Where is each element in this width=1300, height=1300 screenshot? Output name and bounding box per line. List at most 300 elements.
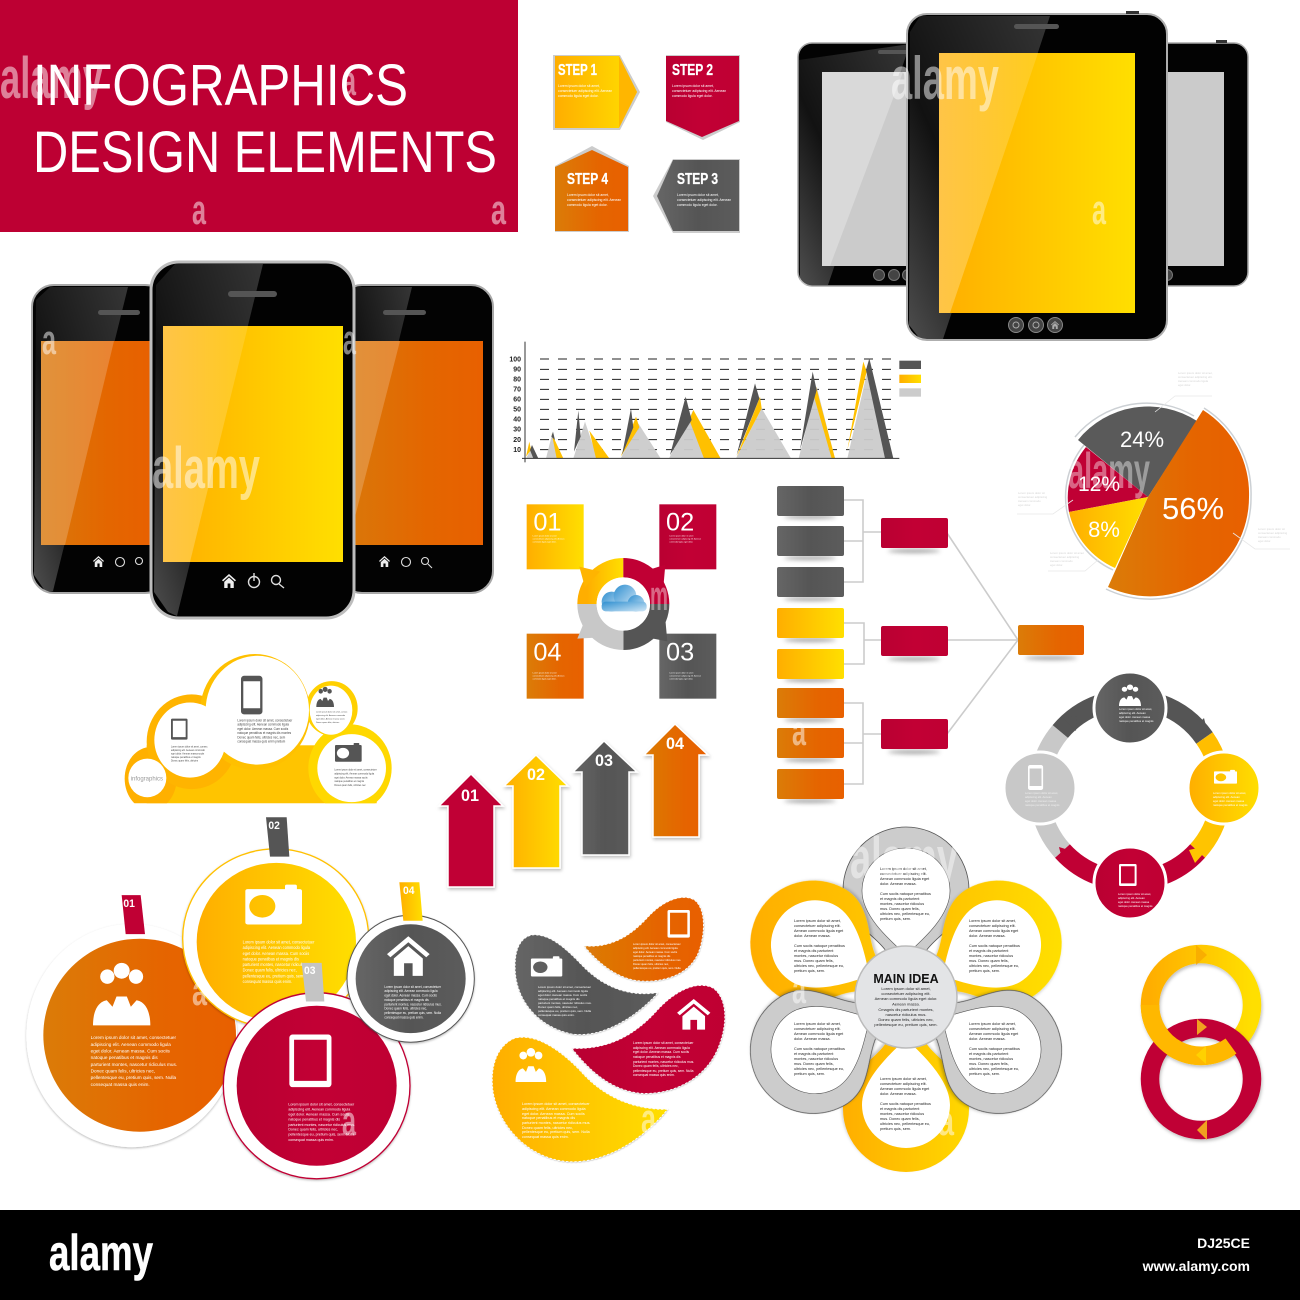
teardrop text: pellentesque eu, pretium quis, sem. Nulla	[522, 1130, 591, 1134]
petal texts: dolor. Aenean massa.	[880, 1092, 917, 1096]
circle text: adipiscing elit. Aenean commodo ligula	[243, 945, 311, 950]
circle text: eget dolor. Aenean massa. Cum sociis	[91, 1048, 170, 1054]
teardrop text: Lorem ipsum dolor sit amet, consectetuer	[522, 1102, 590, 1106]
node: yellow: Lorem ipsum dolor sit amet,	[1213, 791, 1246, 795]
petal texts: Aenean commodo ligula eget	[794, 929, 844, 933]
circle text: pellentesque eu, pretium quis, sem. Nulla	[91, 1075, 176, 1081]
watermarks: a	[192, 186, 206, 233]
cloud captions: adipiscing elit. Aenean commodo ligula	[334, 772, 375, 775]
circle 04: dark grey	[347, 882, 474, 1042]
percentage labels: 24%	[1120, 427, 1164, 452]
petal texts: et magnis dis parturient	[880, 1107, 920, 1111]
step 2: Lorem ipsum dolor sit amet,	[672, 84, 714, 88]
teardrop text: eget dolor. Aenean massa. Cum sociis	[633, 950, 678, 954]
header banner	[0, 0, 518, 232]
chart legend	[899, 361, 921, 397]
cloud captions: adipiscing elit. Aenean commodo ligula	[237, 723, 289, 727]
percentage labels: 56%	[1162, 491, 1224, 526]
back right tablet	[1150, 40, 1248, 286]
cloud captions: Donec quam felis, ultricies nec, sem	[237, 735, 286, 739]
circle text: adipiscing elit. Aenean commodo ligula	[288, 1107, 351, 1111]
box 04: Lorem ipsum dolor sit amet	[533, 671, 557, 674]
circle text: eget dolor. Aenean massa. Cum sociis	[243, 951, 309, 956]
petal texts: et magnis dis parturient	[969, 949, 1009, 953]
pie captions and leaders: Lorem ipsum dolor sit	[1018, 491, 1045, 495]
teardrop: red	[572, 985, 725, 1093]
box 01: Lorem ipsum dolor sit amet	[533, 535, 557, 538]
pie captions and leaders: Lorem ipsum dolor sit amet,	[1178, 371, 1213, 375]
icon: people	[516, 1048, 546, 1082]
chart axis labels: 40	[513, 417, 521, 424]
petal texts: montes, nascetur ridiculus	[880, 902, 924, 906]
tag 01: 01	[123, 898, 135, 910]
teardrop: orange	[584, 897, 703, 981]
tag 02	[266, 817, 289, 857]
step 3	[653, 159, 740, 233]
petal texts: et magnis dis parturient	[794, 1052, 834, 1056]
mountain chart	[509, 342, 921, 462]
main idea heading: MAIN IDEA	[873, 972, 939, 986]
organization tree	[777, 486, 1084, 803]
teardrop text	[522, 942, 694, 1139]
node: red	[1094, 847, 1166, 919]
teardrop text: parturient montes, nascetur ridiculus mus.	[633, 1060, 694, 1064]
pie captions and leaders: eget dolor.	[1050, 563, 1063, 567]
pie rim	[1066, 403, 1251, 599]
circle text: Donec quam felis, ultricies nec,	[384, 1007, 427, 1011]
petal texts: ultricies nec, pellentesque eu,	[969, 1067, 1019, 1071]
middle boxes	[881, 518, 948, 749]
teardrop text: adipiscing elit. Aenean commodo ligula	[633, 1046, 690, 1050]
petal texts: consectetuer adipiscing elit.	[794, 1027, 841, 1031]
petal texts: Cum sociis natoque penatibus	[969, 944, 1020, 948]
circle text: Donec quam felis, ultricies nec,	[288, 1128, 338, 1132]
petal texts: Lorem ipsum dolor sit amet,	[880, 1077, 927, 1081]
petal: lower right grey	[892, 952, 1085, 1137]
cloud panel	[125, 654, 392, 812]
footer logo: alamy	[49, 1225, 153, 1281]
ring arrow markers	[1196, 945, 1207, 1140]
box 02: 02	[666, 509, 694, 537]
circle text: parturient montes, nascetur ridiculus mus.	[91, 1062, 177, 1068]
icon: camera	[531, 956, 562, 976]
back left tablet	[798, 43, 923, 286]
tag 03	[302, 963, 324, 1002]
circle text: eget dolor. Aenean massa. Cum sociis	[288, 1113, 350, 1117]
pie captions and leaders: Aenean commodo ligula	[1178, 379, 1208, 383]
petal texts: dolor. Aenean massa.	[969, 934, 1006, 938]
node: light grey: eget dolor. Aenean massa	[1025, 799, 1057, 803]
node: red: Lorem ipsum dolor sit amet,	[1118, 892, 1151, 896]
back right phone	[340, 285, 493, 593]
cloud captions: Lorem ipsum dolor sit amet, consectetuer	[334, 769, 377, 772]
orange slice	[1108, 410, 1249, 596]
petal texts: pretium quis, sem.	[880, 917, 911, 921]
pie captions and leaders: consectetuer adipiscing	[1050, 555, 1080, 559]
teardrop text: natoque penatibus et magnis dis	[633, 1055, 681, 1059]
watermarks: m	[650, 572, 668, 619]
teardrop text: consequat massa quis enim.	[538, 1013, 575, 1017]
main idea text: Aenean commodo ligula eget dolor.	[875, 996, 937, 1001]
circle 01: orange	[26, 895, 237, 1147]
teardrop text: consequat massa quis enim.	[633, 1073, 675, 1077]
teardrop shapes	[492, 897, 725, 1162]
circle text: eget dolor. Aenean massa. Cum sociis	[384, 994, 437, 998]
node: dark: adipiscing elit. Aenean	[1119, 711, 1146, 715]
petal texts: Lorem ipsum dolor sit amet,	[969, 1022, 1016, 1026]
circle text: Lorem ipsum dolor sit amet, consectetuer	[91, 1035, 176, 1041]
node: dark: Lorem ipsum dolor sit amet,	[1119, 707, 1152, 711]
petal texts: mus. Donec quam felis,	[794, 959, 834, 963]
watermarks: a	[792, 965, 806, 1012]
petal: lower left grey	[727, 952, 920, 1137]
petal texts: montes, nascetur ridiculus	[880, 1112, 924, 1116]
cloud captions: Donec quam felis, ultricies	[316, 721, 339, 724]
image id: DJ25CE	[1197, 1235, 1250, 1251]
teardrop text: Donec quam felis, ultricies nec,	[633, 962, 669, 966]
petal texts: mus. Donec quam felis,	[880, 907, 920, 911]
petal texts: Aenean commodo ligula eget	[794, 1032, 844, 1036]
watermarks: a	[42, 316, 56, 363]
box 01: consectetuer adipiscing elit. Aenean	[533, 538, 564, 541]
watermarks: a	[192, 967, 207, 1014]
circle text: natoque penatibus et magnis dis	[91, 1055, 158, 1061]
petal texts: mus. Donec quam felis,	[880, 1117, 920, 1121]
petal texts: Cum sociis natoque penatibus	[880, 1102, 931, 1106]
petal texts: mus. Donec quam felis,	[794, 1062, 834, 1066]
petal texts: Cum sociis natoque penatibus	[794, 1047, 845, 1051]
chart axis labels	[509, 356, 521, 454]
icon: tablet	[289, 1035, 331, 1087]
tag 03: 03	[304, 965, 316, 977]
arrow 02: 02	[527, 765, 545, 784]
step 1: consectetuer adipiscing elit. Aenean	[558, 89, 612, 93]
petal texts: ultricies nec, pellentesque eu,	[880, 912, 930, 916]
petal texts: montes, nascetur ridiculus	[794, 1057, 838, 1061]
node: yellow: adipiscing elit. Aenean	[1213, 795, 1240, 799]
cloud captions	[171, 710, 377, 787]
cloud captions: natoque penatibus et magnis	[334, 780, 365, 783]
step 2: consectetuer adipiscing elit. Aenean	[672, 89, 726, 93]
cycle ring segments	[1040, 704, 1220, 876]
main idea text: nascetur ridiculus mus.	[886, 1012, 926, 1017]
teardrop text: eget dolor. Aenean massa. Cum sociis	[633, 1050, 689, 1054]
petal texts: Lorem ipsum dolor sit amet,	[880, 867, 927, 871]
petal texts: pretium quis, sem.	[969, 1072, 1000, 1076]
node: light grey: Lorem ipsum dolor sit amet,	[1025, 791, 1058, 795]
cloud captions: eget dolor. Aenean massa. Cum sociis	[237, 727, 289, 731]
teardrop text: natoque penatibus et magnis dis	[633, 954, 671, 958]
cloud captions: natoque penatibus et magnis dis montes	[237, 731, 292, 735]
step 2	[666, 55, 740, 140]
step 3: consectetuer adipiscing elit. Aenean	[677, 198, 731, 202]
circle text: parturient montes, nascetur ridiculus mus.	[243, 962, 315, 967]
cloud captions: Donec quam felis, ultricies	[171, 759, 199, 762]
red slice	[1068, 447, 1148, 512]
circle text: parturient montes, nascetur ridiculus mus.	[288, 1123, 355, 1127]
arrow 02	[504, 755, 568, 868]
node: light grey	[1004, 752, 1076, 824]
box 04: consectetuer adipiscing elit. Aenean	[533, 674, 564, 677]
teardrop text: Donec quam felis, ultricies nec,	[633, 1064, 679, 1068]
teardrop text: natoque penatibus et magnis dis	[522, 1116, 575, 1120]
teardrop text: Lorem ipsum dolor sit amet, consectetuer	[538, 985, 591, 989]
circle text: adipiscing elit. Aenean commodo ligula	[91, 1042, 171, 1048]
box 02: Lorem ipsum dolor sit amet	[669, 535, 694, 538]
box 03: 03	[666, 639, 694, 667]
four-part cloud diagram	[527, 504, 716, 699]
petal texts: ultricies nec, pellentesque eu,	[794, 964, 844, 968]
circle text: adipiscing elit. Aenean commodo ligula	[384, 989, 438, 993]
arrow 01: 01	[461, 786, 479, 805]
petal texts: montes, nascetur ridiculus	[794, 954, 838, 958]
pie captions and leaders: Aenean commodo	[1258, 535, 1281, 539]
watermarks: alamy	[0, 46, 103, 111]
node: dark: natoque penatibus et magnis	[1119, 719, 1154, 723]
phones	[32, 262, 493, 618]
tag 01	[122, 895, 145, 934]
chart axis labels: 100	[509, 356, 521, 363]
teardrop text: adipiscing elit. Aenean commodo ligula	[522, 1107, 586, 1111]
step 1: commodo ligula eget dolor.	[558, 94, 599, 98]
circle 02: yellow	[183, 817, 369, 1028]
tag 04	[399, 882, 423, 921]
node: light grey: natoque penatibus et magnis	[1025, 803, 1060, 807]
petal texts: consectetuer adipiscing elit.	[880, 1082, 927, 1086]
circle text: consequat massa quis enim.	[384, 1015, 424, 1019]
chart axis labels: 90	[513, 367, 521, 374]
main idea text: pellentesque eu, pretium quis, sem.	[874, 1022, 938, 1027]
petal texts: ultricies nec, pellentesque eu,	[969, 964, 1019, 968]
petal: bottom yellow	[843, 1017, 969, 1172]
circle text: parturient montes, nascetur ridiculus mus.	[384, 1002, 442, 1006]
icon: people	[93, 963, 150, 1025]
cycle arrow tips	[1059, 716, 1211, 863]
connector lines	[844, 500, 1018, 784]
teardrop text: adipiscing elit. Aenean commodo ligula	[633, 946, 678, 950]
cloud captions: Lorem ipsum dolor sit amet, consectetuer	[237, 718, 292, 722]
cloud captions: Lorem ipsum dolor sit amet, consec	[316, 710, 347, 713]
box 02	[659, 504, 716, 569]
icon: camera	[335, 743, 362, 762]
main idea text: Aenean massa.	[892, 1002, 920, 1006]
main idea text: Lorem ipsum dolor sit amet,	[881, 986, 931, 991]
circle text: Donec quam felis, ultricies nec,	[243, 968, 297, 973]
front phone	[151, 262, 354, 618]
teardrop: dark grey	[515, 935, 658, 1035]
node: yellow: natoque penatibus et magnis	[1213, 803, 1248, 807]
box 03: commodo ligula eget dolor.	[669, 677, 693, 680]
interlocking rings	[1150, 945, 1252, 1140]
box 03: consectetuer adipiscing elit. Aenean	[669, 674, 701, 677]
watermarks: a	[938, 1097, 954, 1144]
pie captions and leaders	[1017, 371, 1290, 571]
arrow 03	[573, 741, 637, 855]
step 3: STEP 3	[677, 171, 718, 188]
petal texts: Aenean commodo ligula eget	[969, 1032, 1019, 1036]
cloud captions: adipiscing elit. Aenean commodo	[171, 749, 205, 752]
petal texts: Lorem ipsum dolor sit amet,	[794, 919, 841, 923]
petal texts: et magnis dis parturient	[794, 949, 834, 953]
petal: upper left yellow	[727, 857, 920, 1042]
petal texts: consectetuer adipiscing elit.	[969, 1027, 1016, 1031]
box shadows	[784, 515, 1077, 803]
percentage labels: 12%	[1078, 473, 1120, 496]
watermarks: a	[343, 316, 356, 363]
node: light grey: adipiscing elit. Aenean	[1025, 795, 1052, 799]
box 04	[527, 634, 584, 699]
petal texts: Cum sociis natoque penatibus	[969, 1047, 1020, 1051]
step 1: Lorem ipsum dolor sit amet,	[558, 84, 600, 88]
teardrop text: pellentesque eu, pretium quis, sem. Nulla	[633, 1069, 694, 1073]
pie captions and leaders: eget dolor.	[1178, 383, 1191, 387]
teardrop text: parturient montes, nascetur ridiculus mus.	[538, 1001, 592, 1005]
box 01	[527, 504, 584, 569]
teardrop: yellow	[492, 1037, 668, 1162]
source boxes	[777, 486, 844, 799]
petal texts: montes, nascetur ridiculus	[969, 954, 1013, 958]
petal texts: ultricies nec, pellentesque eu,	[794, 1067, 844, 1071]
node: dark	[1094, 672, 1166, 744]
petal texts: ultricies nec, pellentesque eu,	[880, 1122, 930, 1126]
petal texts: mus. Donec quam felis,	[969, 1062, 1009, 1066]
teardrop text: Donec quam felis, ultricies nec,	[538, 1005, 578, 1009]
chart axis labels: 30	[513, 427, 521, 434]
icon: house	[677, 999, 710, 1030]
petal texts: dolor. Aenean massa.	[794, 1037, 831, 1041]
front tablet	[907, 11, 1167, 340]
circle text: natoque penatibus et magnis dis	[243, 956, 299, 961]
cloud captions: consequat massa quis enim pretium	[237, 739, 286, 744]
chart axis labels: 80	[513, 377, 521, 384]
node: dark: eget dolor. Aenean massa	[1119, 715, 1151, 719]
arrow 04	[644, 724, 708, 837]
red ring	[1150, 1028, 1252, 1130]
node: red: adipiscing elit. Aenean	[1118, 896, 1145, 900]
watermarks: a	[792, 707, 806, 754]
main idea text: Cmagnis dis parturient montes,	[878, 1007, 934, 1012]
icon: cloud	[602, 585, 647, 612]
circle text: natoque penatibus et magnis dis	[288, 1117, 340, 1122]
flower diagram: main idea	[727, 827, 1085, 1172]
arrow 04: 04	[666, 734, 685, 753]
title: INFOGRAPHICS	[33, 53, 408, 118]
yellow ring	[1150, 954, 1252, 1056]
pie captions and leaders: Lorem ipsum dolor sit	[1258, 527, 1285, 531]
four-node cycle	[1004, 672, 1260, 919]
yellow ring overlap	[1150, 1005, 1231, 1056]
title: DESIGN ELEMENTS	[33, 120, 497, 185]
watermarks: alamy	[1068, 443, 1150, 499]
teardrop text: parturient montes, nascetur ridiculus mus.	[522, 1121, 590, 1125]
icon: people	[316, 687, 334, 707]
icon: tablet	[668, 910, 690, 938]
circle text: consequat massa quis enim.	[288, 1138, 334, 1142]
center circle	[855, 946, 957, 1048]
pie captions and leaders: consectetuer adipiscing	[1258, 531, 1288, 535]
petal texts: consectetuer adipiscing elit.	[880, 872, 927, 876]
step 1	[553, 55, 640, 130]
teardrop text: adipiscing elit. Aenean commodo ligula	[538, 989, 588, 993]
icon: tablet	[171, 719, 188, 740]
chart axis labels: 60	[513, 397, 521, 404]
result box	[1018, 625, 1084, 655]
cloud captions: Donec quam felis, ultricies nec	[334, 784, 366, 787]
step 2: commodo ligula eget dolor.	[672, 94, 713, 98]
percentage labels: 8%	[1088, 517, 1120, 542]
step 4: consectetuer adipiscing elit. Aenean	[567, 198, 621, 202]
petal texts: montes, nascetur ridiculus	[969, 1057, 1013, 1061]
box 04: 04	[533, 639, 562, 667]
circle text: Lorem ipsum dolor sit amet, consectetuer	[384, 985, 441, 989]
watermarks: a	[342, 1097, 356, 1144]
petal texts: consectetuer adipiscing elit.	[794, 924, 841, 928]
step 4: commodo ligula eget dolor.	[567, 203, 608, 207]
cloud captions: adipiscing elit. Aenean commodo	[316, 714, 346, 717]
chart axis labels: 70	[513, 387, 521, 394]
chart axis labels: 20	[513, 437, 521, 444]
teardrop text: eget dolor. Aenean massa. Cum sociis	[538, 993, 588, 997]
step 1: STEP 1	[558, 62, 597, 79]
teardrop text: parturient montes, nascetur ridiculus mus.	[633, 958, 681, 962]
box 04: commodo ligula eget dolor.	[533, 677, 557, 680]
watermarks: a	[342, 57, 356, 104]
icon: house	[387, 936, 430, 976]
icon: camera	[245, 885, 302, 924]
pie captions and leaders: Aenean commodo	[1018, 499, 1041, 503]
petal texts: Aenean commodo ligula eget	[880, 877, 930, 881]
circle text: consequat massa quis enim.	[91, 1082, 150, 1088]
numbered arrows	[439, 724, 708, 887]
petal texts: dolor. Aenean massa.	[880, 882, 917, 886]
cloud captions: natoque penatibus et magnis	[171, 756, 201, 759]
petal texts: pretium quis, sem.	[794, 1072, 825, 1076]
box 03	[659, 634, 716, 699]
label: infographics: infographics	[131, 775, 163, 782]
watermarks: alamy	[152, 436, 260, 501]
teardrop text: Lorem ipsum dolor sit amet, consectetuer	[633, 942, 681, 946]
petal texts	[794, 867, 1020, 1131]
petal texts: pretium quis, sem.	[969, 969, 1000, 973]
petal texts: Aenean commodo ligula eget	[880, 1087, 930, 1091]
cloud captions: eget dolor. Aenean massa sociis	[334, 776, 368, 779]
line and area chart, four-part diagram	[509, 342, 921, 699]
title	[33, 53, 497, 185]
petal texts: consectetuer adipiscing elit.	[969, 924, 1016, 928]
node: red: natoque penatibus et magnis	[1118, 904, 1153, 908]
tablets	[798, 11, 1248, 340]
circle text: natoque penatibus et magnis dis	[384, 998, 429, 1002]
tag 02: 02	[268, 820, 280, 832]
pie chart	[1017, 371, 1290, 599]
box 02: commodo ligula eget dolor.	[669, 541, 693, 544]
petal texts: et magnis dis parturient	[969, 1052, 1009, 1056]
teardrop text: pellentesque eu, pretium quis, sem. Nulla	[538, 1009, 591, 1013]
main idea text: Donec quam felis, ultricies nec,	[878, 1017, 934, 1022]
petal texts: pretium quis, sem.	[794, 969, 825, 973]
step 4: STEP 4	[567, 171, 608, 188]
watermarks: alamy	[850, 826, 958, 891]
cloud captions: eget dolor. Aenean massa sociis	[171, 752, 205, 755]
box 01: 01	[533, 509, 562, 537]
pie captions and leaders: consectetuer adipiscing elit.	[1178, 375, 1213, 379]
ring of four arrows	[577, 565, 667, 641]
node: yellow	[1188, 752, 1260, 824]
petal texts: Cum sociis natoque penatibus	[794, 944, 845, 948]
chart axis labels: 10	[513, 447, 521, 454]
watermarks: a	[641, 1095, 656, 1142]
box 02: consectetuer adipiscing elit. Aenean	[669, 538, 701, 541]
